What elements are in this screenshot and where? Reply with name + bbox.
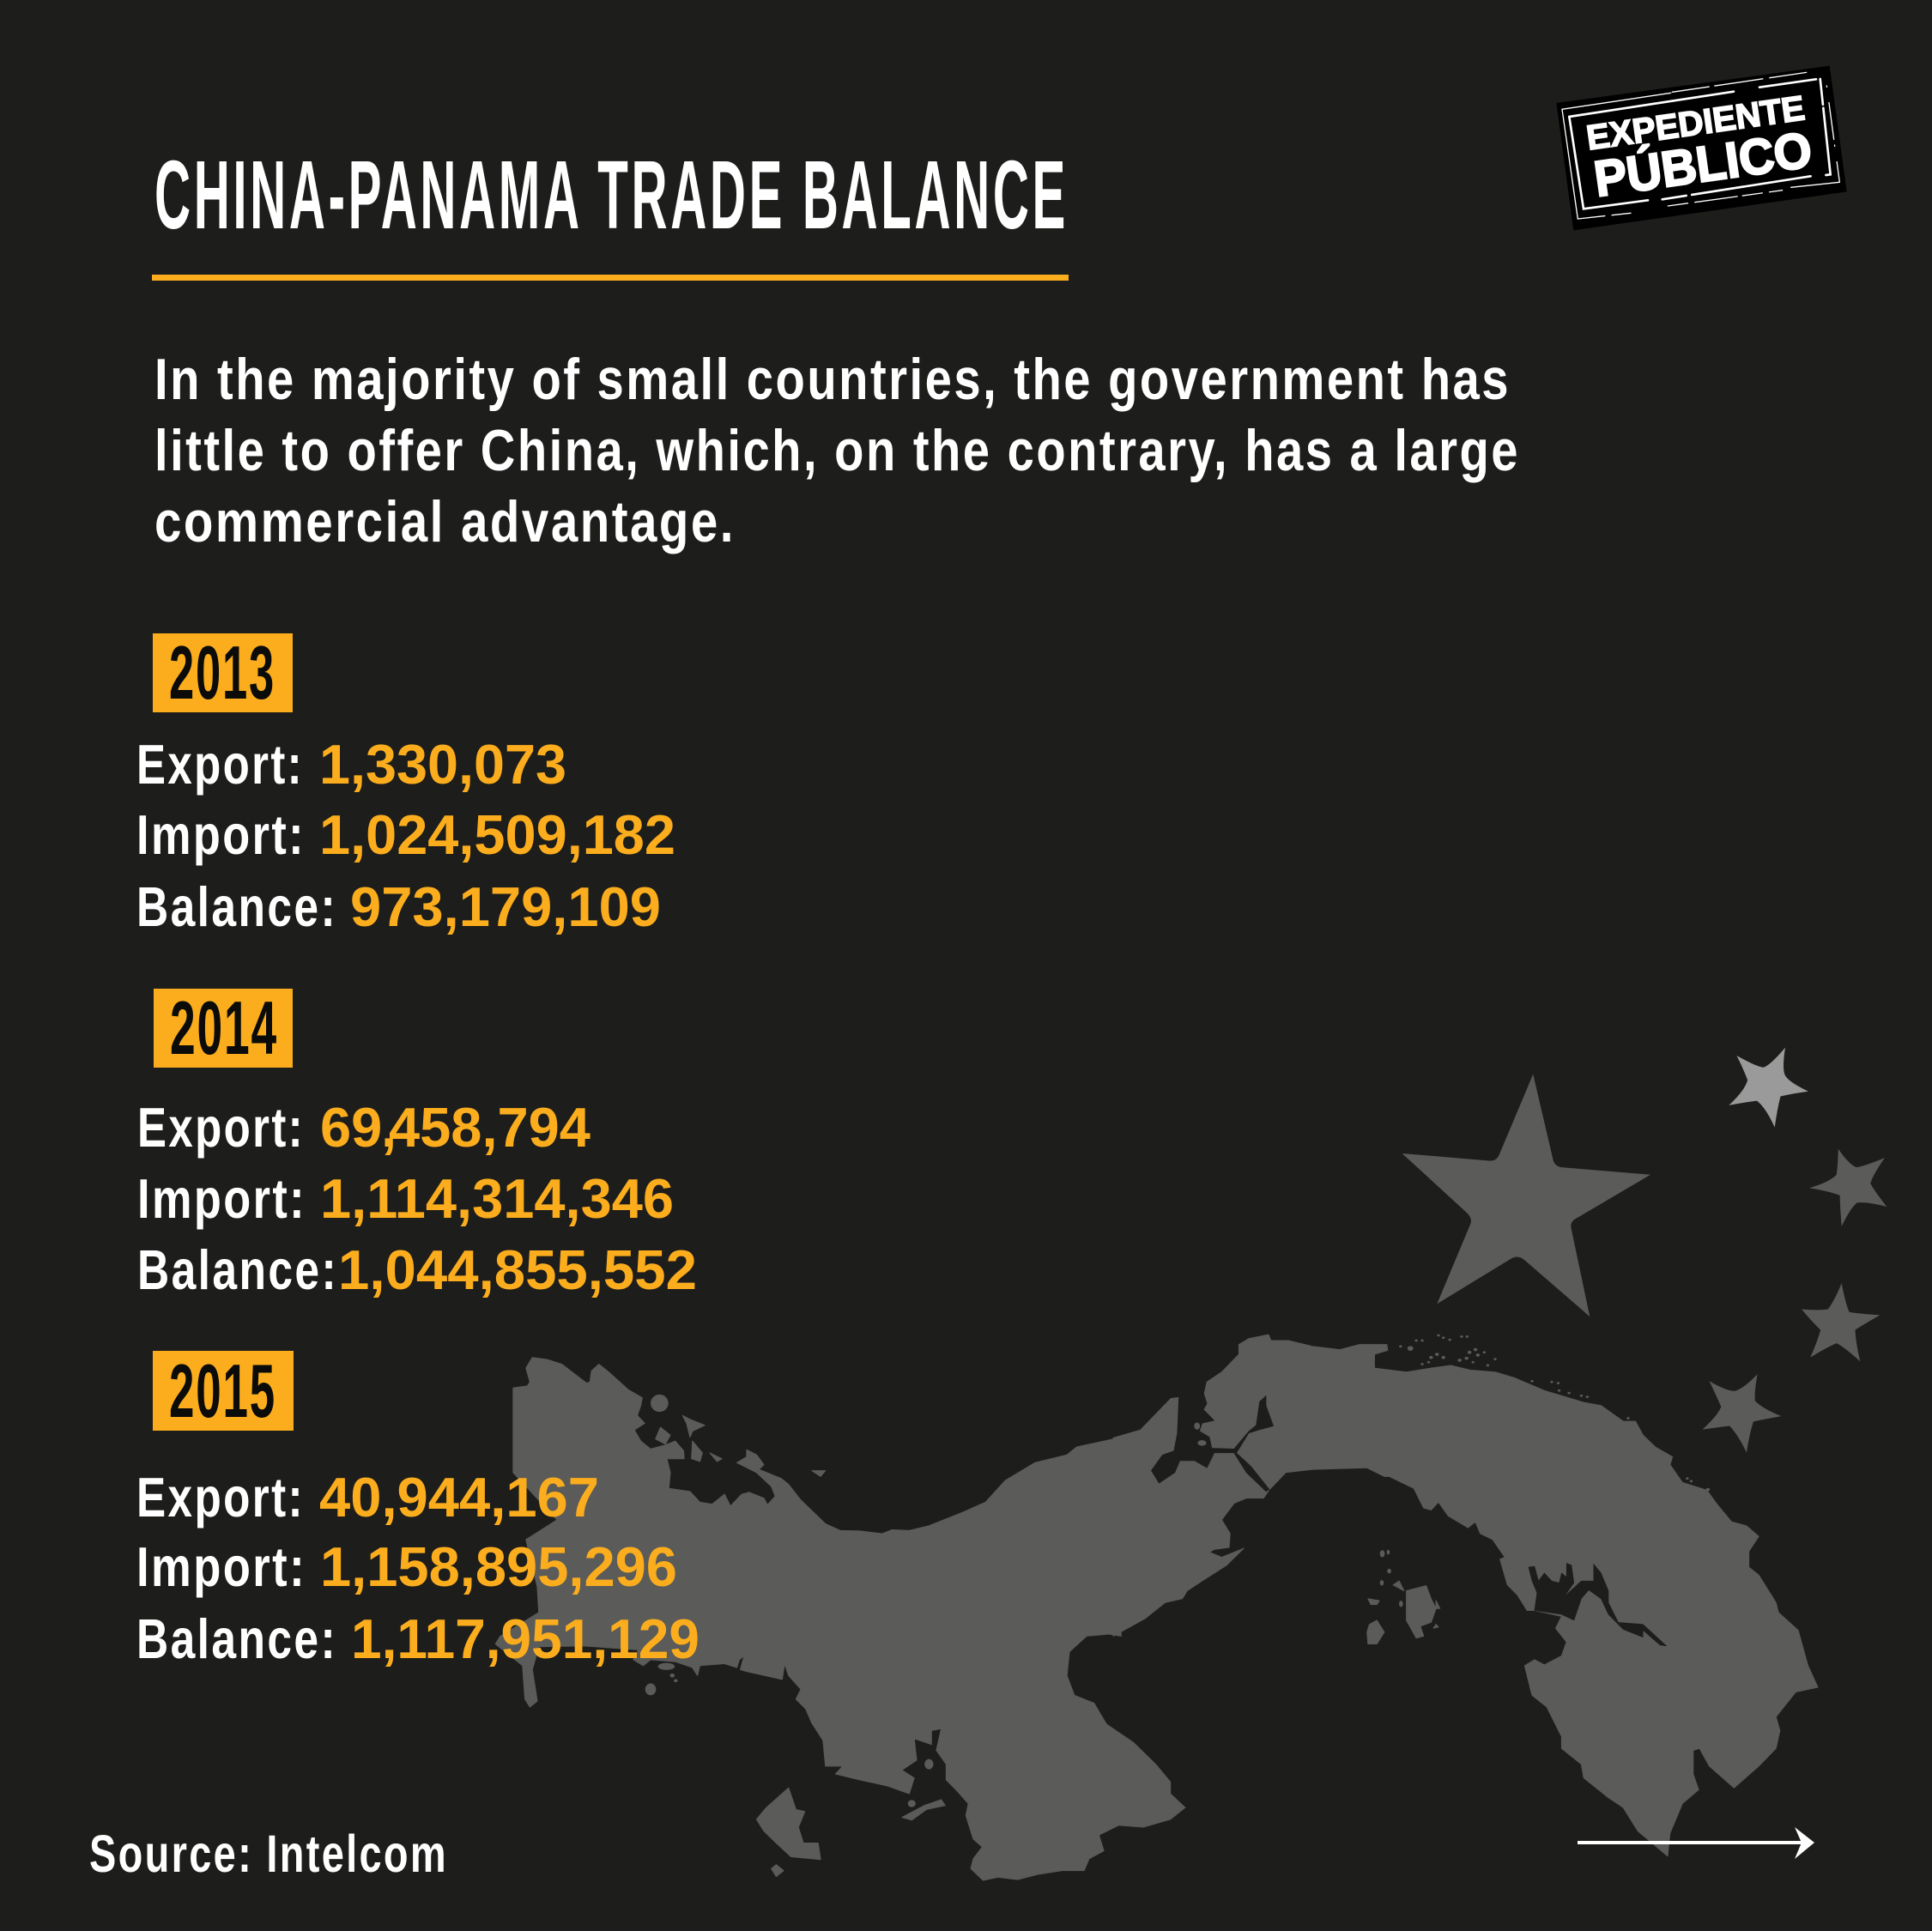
import 2015: 1,158,895,296	[320, 1535, 677, 1598]
year badge 2013: 2013	[169, 630, 276, 715]
intro text: commercial advantage.	[154, 489, 736, 554]
icon: large star	[1402, 1074, 1650, 1317]
intro text: little to offer China, which, on the contrary, has a large	[154, 418, 1520, 483]
map: San Blas islets	[1399, 1335, 1710, 1491]
icon: small star 2	[1809, 1149, 1887, 1226]
export 2014: 69	[320, 1096, 382, 1159]
import 2015	[136, 1535, 677, 1598]
map: western part	[495, 1358, 1185, 1880]
export 2014	[137, 1096, 591, 1159]
icon: small star 4	[1703, 1374, 1781, 1452]
stars of the Chinese flag	[1402, 1048, 1887, 1452]
import 2015: Import:	[136, 1535, 306, 1598]
icon: small star 3	[1802, 1283, 1880, 1361]
panel: 2013 figures	[136, 630, 675, 938]
import 2013: Import:	[136, 803, 306, 866]
title: CHINA-PANAMA TRADE BALANCE	[154, 141, 1069, 249]
map: Darien estuary	[1529, 1563, 1667, 1646]
year badge 2013	[153, 630, 293, 715]
logo text: EXPEDIENTE: EXPEDIENTE	[1584, 88, 1807, 158]
balance 2014	[137, 1238, 697, 1301]
map: eastern part	[1113, 1335, 1818, 1856]
export 2014: ,	[381, 1096, 397, 1159]
balance 2014: 1,044,855,552	[338, 1238, 697, 1301]
year badge 2015: 2015	[169, 1348, 276, 1433]
logo: Expediente Público stamp	[1556, 66, 1847, 230]
title underline	[152, 275, 1069, 281]
year badge 2015	[153, 1348, 294, 1433]
export 2013: 1,330,073	[319, 733, 566, 796]
export 2015: Export:	[136, 1466, 305, 1528]
panel: 2014 figures	[137, 985, 697, 1301]
logo text: PÚBLICO: PÚBLICO	[1590, 121, 1815, 208]
balance 2013: 973,179,109	[350, 875, 661, 938]
panel: 2015 figures	[136, 1348, 700, 1670]
intro text	[154, 347, 1520, 554]
map: Gatun lake and canal	[1151, 1393, 1274, 1492]
export 2014: Export:	[137, 1096, 305, 1159]
import 2014	[137, 1167, 674, 1230]
map of Panama	[495, 1335, 1818, 1880]
source note: Source: Intelcom	[89, 1825, 448, 1883]
export 2013: Export:	[136, 733, 304, 796]
balance 2013	[136, 875, 661, 938]
export 2013	[136, 733, 566, 796]
balance 2014: Balance:	[137, 1238, 338, 1301]
import 2013	[136, 803, 675, 866]
balance 2015: Balance:	[136, 1607, 337, 1670]
import 2014: Import:	[137, 1167, 306, 1230]
export 2015	[136, 1466, 599, 1528]
map: Pearl Islands	[1367, 1550, 1440, 1644]
intro text: In the majority of small countries, the government has	[154, 347, 1511, 412]
import 2014: 1,114,314,346	[320, 1167, 674, 1230]
balance 2015	[136, 1607, 700, 1670]
arrow	[1578, 1827, 1814, 1859]
balance 2015: 1,117,951,129	[351, 1607, 700, 1670]
icon: small light star	[1729, 1048, 1808, 1128]
export 2015: 40,944,167	[319, 1466, 599, 1528]
import 2013: 1,024,509,182	[319, 803, 675, 866]
year badge 2014: 2014	[170, 985, 278, 1070]
export 2014: 458,794	[389, 1096, 591, 1159]
balance 2013: Balance:	[136, 875, 337, 938]
year badge 2014	[154, 985, 293, 1070]
